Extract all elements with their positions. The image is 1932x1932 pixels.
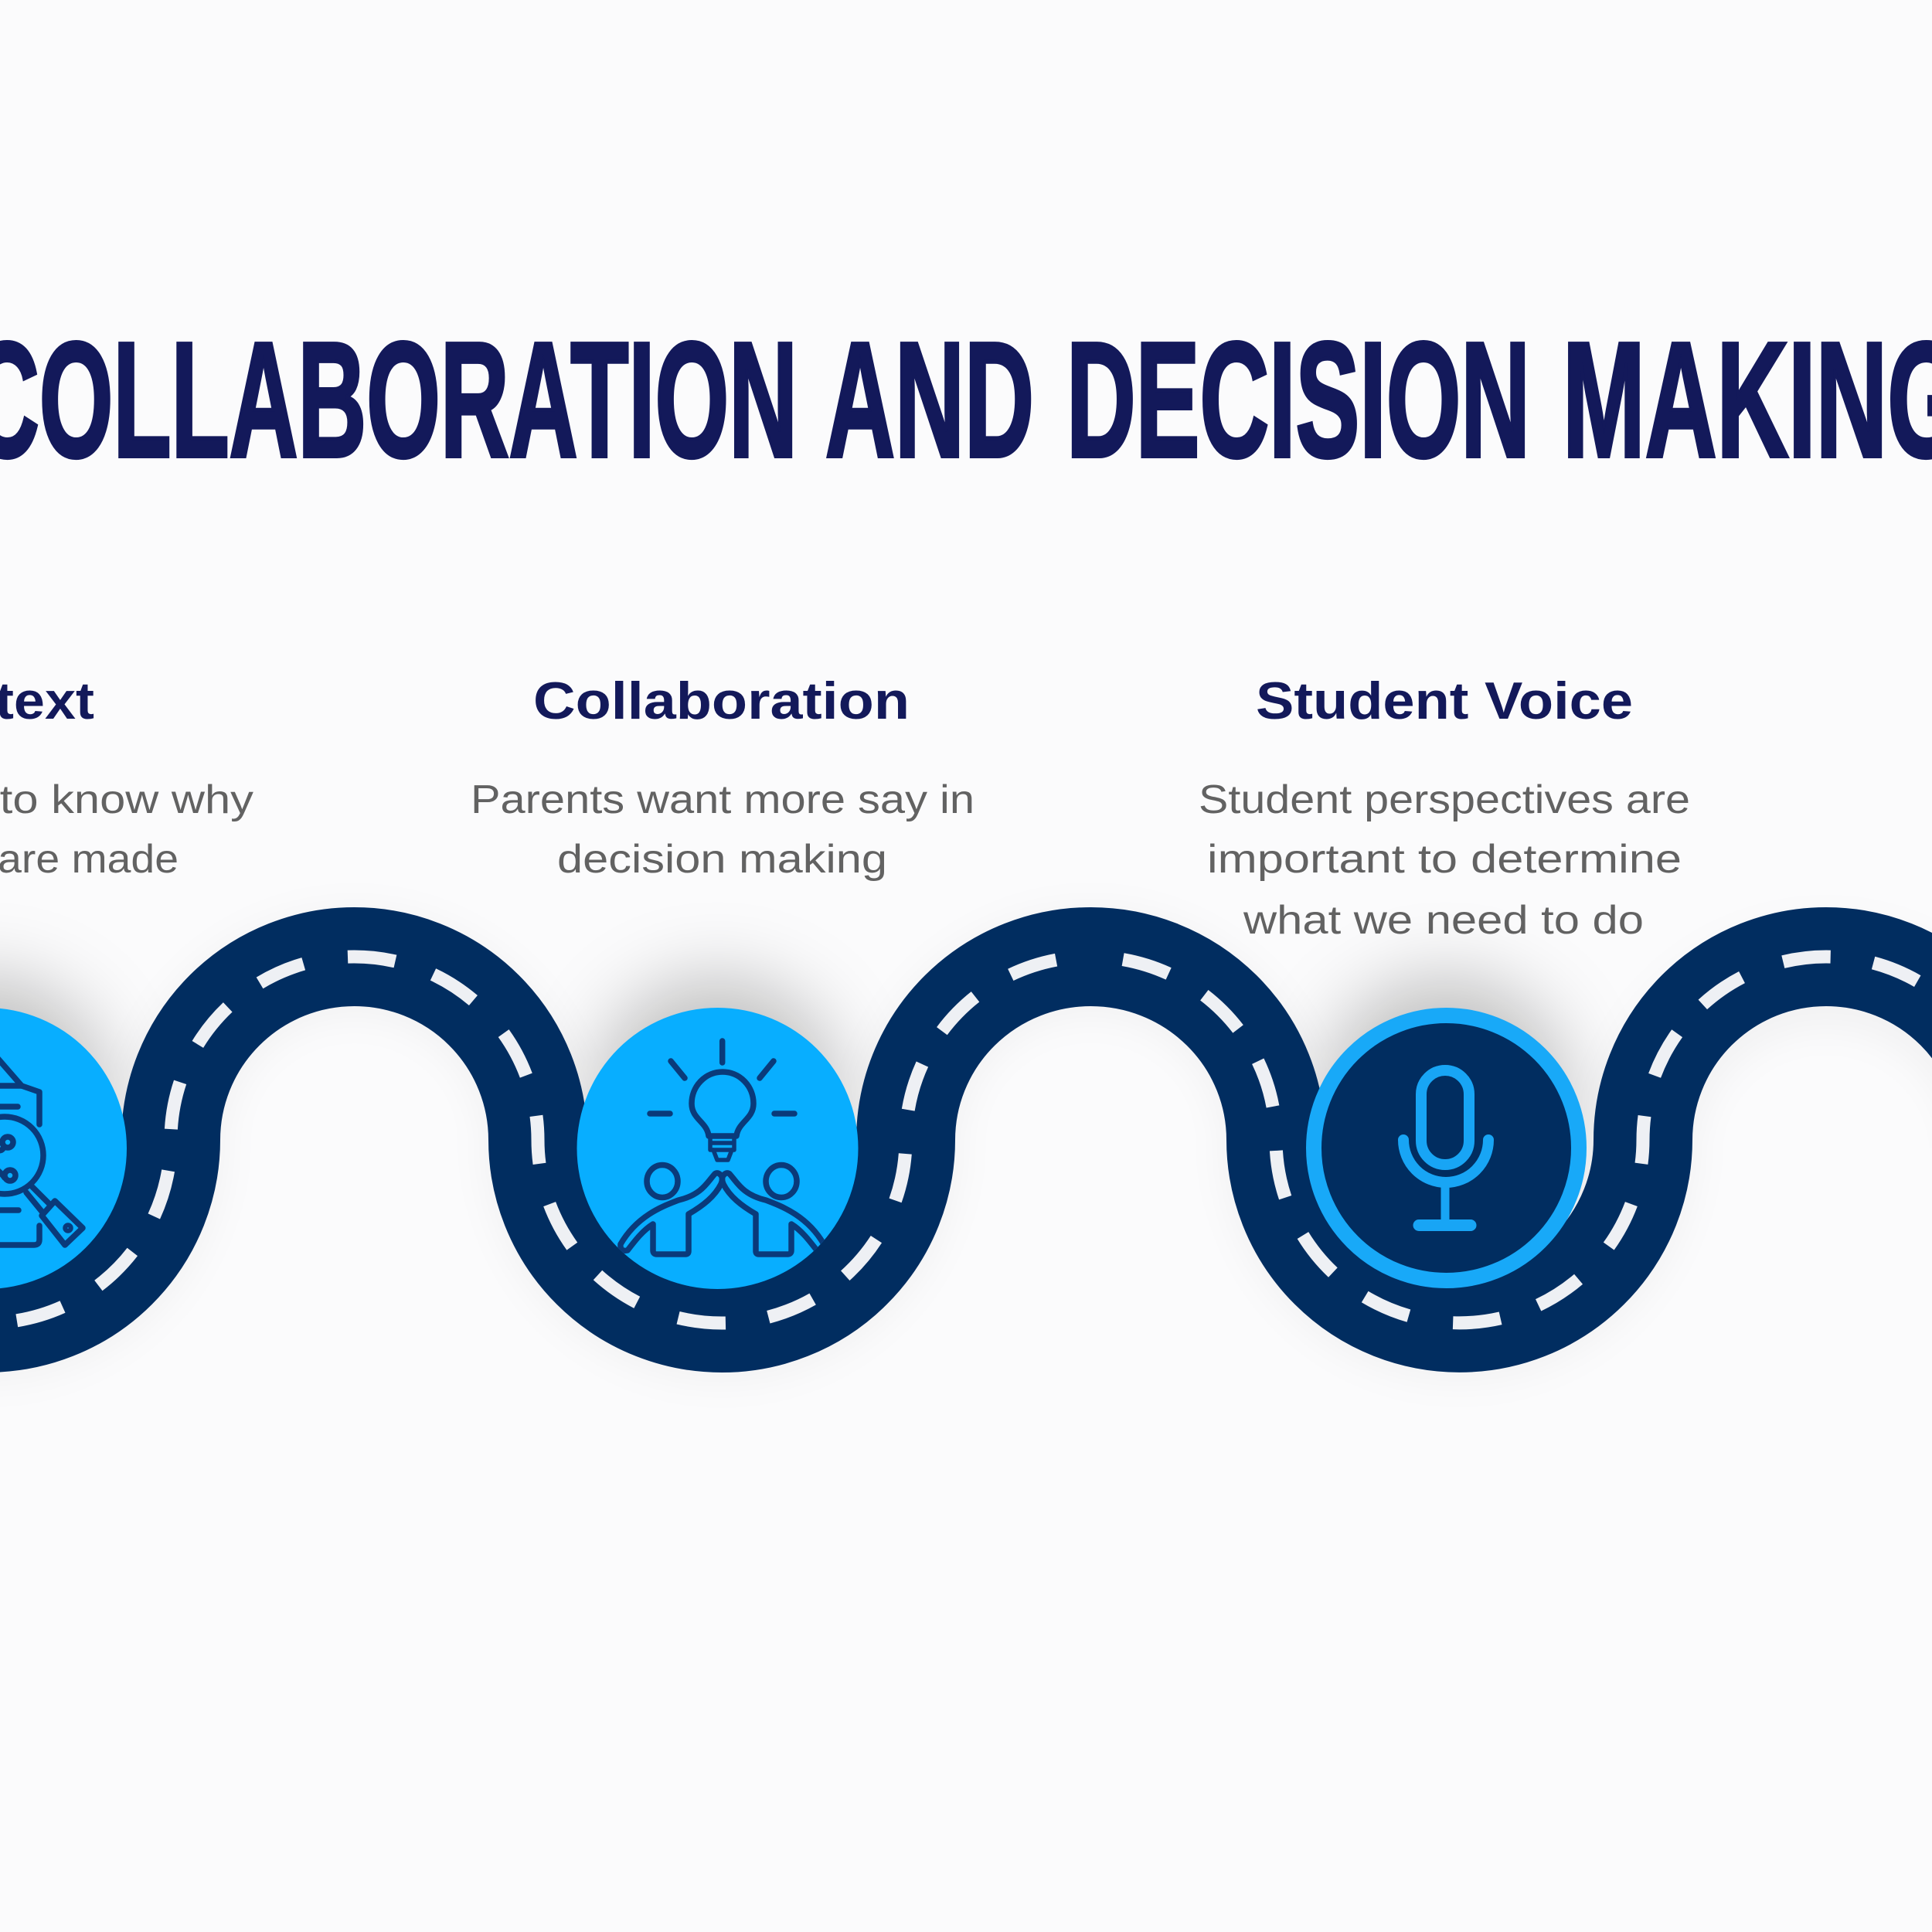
title: AND [825,308,1034,492]
text block: student voice: important to determine [1207,837,1682,882]
road lane dashes [0,957,1932,1323]
shadows under road and circles [0,962,1932,1328]
winding road [0,957,1932,1323]
text block: collaboration: Collaboration [533,672,910,730]
icon circle: document and magnifier [0,1008,127,1289]
text block: student voice [1199,672,1690,943]
text block: student voice: what we need to do [1243,898,1644,943]
icon circle: microphone [1314,1015,1579,1281]
text block: context [0,672,253,882]
text block: collaboration: decision making [557,837,887,882]
text block: collaboration [471,672,975,882]
text block: collaboration: Parents want more say in [471,777,975,822]
title: DECISION [1066,308,1530,492]
icon circle: lightbulb and high five [577,1008,858,1289]
text block: student voice: Student perspectives are [1199,777,1690,822]
text block: student voice: Student Voice [1256,672,1633,730]
title: COLLABORATION [0,308,798,492]
